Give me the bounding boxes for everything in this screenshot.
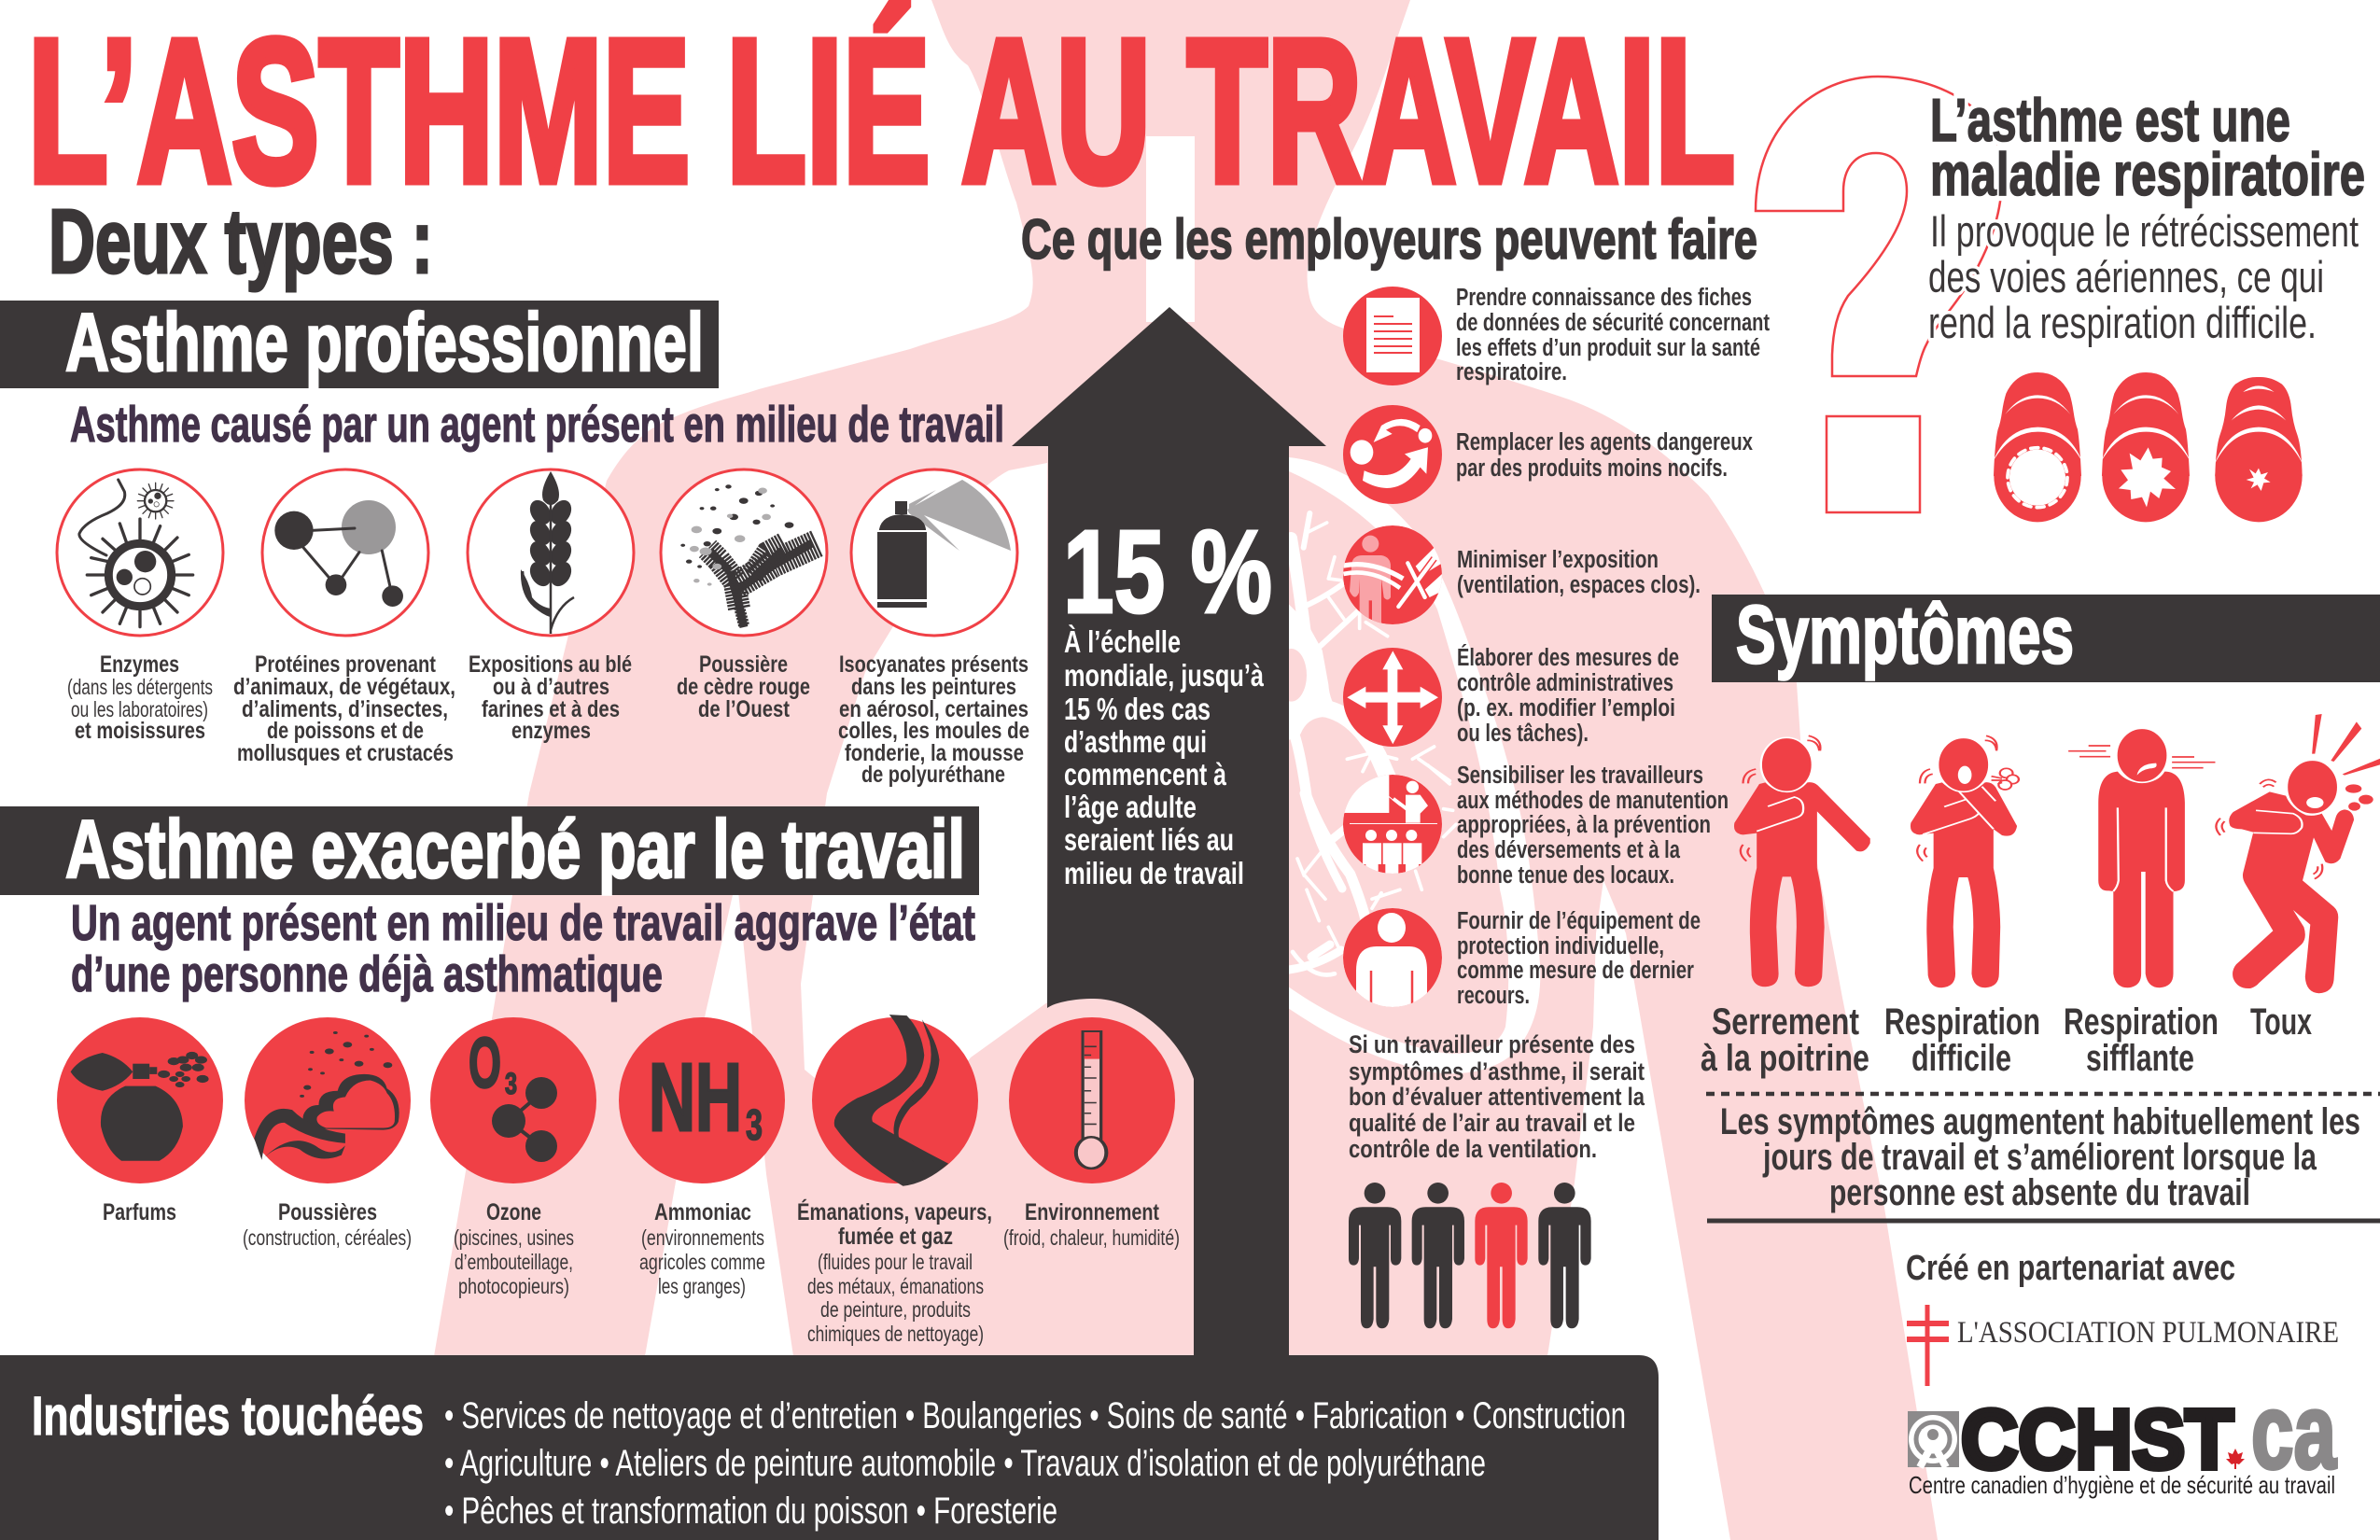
text: travailleur asthmatique: qualité de l’air au travail et le <box>1349 1109 1635 1137</box>
caption: ammoniac: les granges) <box>658 1274 746 1298</box>
panel: asthme exacerbé banner: Asthme exacerbé par le travail <box>65 803 965 895</box>
label: serrement: à la poitrine <box>1701 1038 1869 1079</box>
text: élaborer <box>1457 644 1679 747</box>
caption: isocyanates: de polyuréthane <box>861 762 1005 788</box>
emblem <box>1908 1411 1959 1467</box>
caption: ozone: photocopieurs) <box>458 1274 569 1298</box>
list: industries: • Agriculture • Ateliers de peinture automobile • Travaux d’isolation et de polyuréthane <box>444 1443 1486 1484</box>
text block: description <box>1928 206 2359 347</box>
text: maladie respiratoire <box>1928 86 2365 347</box>
icon: fumes <box>812 1015 978 1186</box>
caption: wheat: ou à d’autres <box>493 674 609 700</box>
caption: poussières: (construction, céréales) <box>243 1225 412 1250</box>
caption: isocyanates: Isocyanates présents <box>839 651 1029 678</box>
caption: émanations: Émanations, vapeurs, <box>797 1198 992 1225</box>
text: fournir: Fournir de l’équipement de <box>1457 908 1701 934</box>
caption: wheat: enzymes <box>511 718 591 744</box>
panel: industries touchées <box>0 1355 1659 1540</box>
caption: isocyanates: en aérosol, certaines <box>839 696 1029 722</box>
caption: émanations: des métaux, émanations <box>807 1274 984 1298</box>
caption: enzymes <box>67 651 213 744</box>
caption: environnement: Environnement <box>1025 1199 1160 1225</box>
caption: environnement: (froid, chaleur, humidité) <box>1003 1225 1180 1250</box>
figure: toux <box>2216 714 2380 993</box>
label: respiration sifflante: Respiration <box>2064 1001 2219 1043</box>
icon row: airway narrowing <box>1993 372 2303 522</box>
logo: CCHST <box>1908 1373 2337 1499</box>
text: sensibiliser: appropriées, à la prévention <box>1457 812 1711 838</box>
icon: wheat <box>468 469 634 636</box>
icon: ammonia: 3 <box>746 1100 763 1149</box>
caption: enzymes: ou les laboratoires) <box>71 697 208 721</box>
label: respiration difficile: difficile <box>1911 1038 2011 1079</box>
text: travailleur asthmatique: bon d’évaluer attentivement la <box>1349 1083 1645 1111</box>
caption: proteins: d’aliments, d’insectes, <box>242 696 448 722</box>
text: fournir: recours. <box>1457 983 1530 1009</box>
statistic: 15 %: commencent à <box>1064 757 1226 791</box>
icon: four workers <box>1349 1183 1591 1328</box>
text: fiches: de données de sécurité concernant <box>1456 310 1770 336</box>
caption: cedar: de l’Ouest <box>698 696 791 722</box>
text: sensibiliser: Sensibiliser les travailleurs <box>1457 763 1703 789</box>
text: travailleur asthmatique: contrôle de la ventilation. <box>1349 1135 1597 1163</box>
figure: serrement à la poitrine <box>1734 735 1870 987</box>
caption: émanations: chimiques de nettoyage) <box>807 1322 984 1346</box>
text: remplacer: Remplacer les agents dangereux <box>1456 429 1753 455</box>
caption: isocyanates: fonderie, la mousse <box>845 740 1024 766</box>
text: minimiser: (ventilation, espaces clos). <box>1457 572 1701 598</box>
label: respiration difficile: Respiration <box>1884 1001 2040 1043</box>
icon: constricted airway <box>2214 377 2303 522</box>
text: sensibiliser: bonne tenue des locaux. <box>1457 862 1674 889</box>
text: fournir: comme mesure de dernier <box>1457 958 1694 984</box>
text: remplacer <box>1456 429 1753 482</box>
label: toux: Toux <box>2250 1001 2312 1043</box>
icon: proteins <box>262 469 428 636</box>
caption: ozone <box>454 1199 574 1298</box>
icon: ozone <box>430 1017 596 1183</box>
subtitle: agent aggrave: d’une personne déjà asthmatique <box>71 946 663 1002</box>
caption: ammoniac: agricoles comme <box>639 1250 765 1274</box>
text: fiches <box>1456 285 1770 385</box>
icon: protective equipment <box>1343 908 1442 1017</box>
icon row: occupational agents <box>57 469 1017 636</box>
caption: proteins: mollusques et crustacés <box>237 740 454 766</box>
statistic: 15 %: milieu de travail <box>1064 856 1244 890</box>
icon: four arrows <box>1343 648 1442 747</box>
caption: ozone: (piscines, usines <box>454 1225 574 1250</box>
text: travailleur asthmatique <box>1349 1030 1645 1163</box>
text: symptoms note: personne est absente du travail <box>1829 1172 2250 1213</box>
caption: ammoniac: (environnements <box>641 1225 764 1250</box>
text: fournir: protection individuelle, <box>1457 933 1664 959</box>
labels: symptoms <box>1701 1001 2312 1079</box>
figures: symptoms <box>1734 714 2380 993</box>
heading: deux types: Deux types : <box>49 190 433 292</box>
subtitle: asthme causé: Asthme causé par un agent présent en milieu de travail <box>70 397 1004 453</box>
text: partenariat: Créé en partenariat avec <box>1906 1249 2235 1288</box>
captions: aggravating agents <box>103 1198 1180 1346</box>
logo: association pulmonaire <box>1907 1305 2339 1386</box>
text: élaborer: ou les tâches). <box>1457 721 1589 747</box>
text: sensibiliser: aux méthodes de manutention <box>1457 788 1729 814</box>
text: fiches: Prendre connaissance des fiches <box>1456 285 1752 311</box>
icon: thermometer <box>1009 1017 1175 1183</box>
icon row: aggravating agents <box>57 1015 1175 1186</box>
subtitle: agent aggrave <box>71 895 975 1002</box>
captions: occupational agents <box>67 651 1029 788</box>
text: minimiser <box>1457 547 1701 598</box>
text: remplacer: par des produits moins nocifs. <box>1456 455 1728 482</box>
icon: dust cloud <box>245 1017 411 1183</box>
caption: parfums: Parfums <box>103 1199 176 1225</box>
statistic: 15 % <box>1063 506 1272 890</box>
list: industries: • Pêches et transformation du poisson • Foresterie <box>444 1491 1057 1532</box>
statistic: 15 %: d’asthme qui <box>1064 724 1207 759</box>
caption: wheat: Expositions au blé <box>469 651 632 678</box>
statistic: 15 %: seraient liés au <box>1064 822 1234 857</box>
icon: enzymes <box>57 469 223 636</box>
label: respiration difficile <box>1884 1001 2040 1079</box>
statistic: 15 %: À l’échelle <box>1064 624 1181 659</box>
icon: spray can <box>851 469 1017 636</box>
label: serrement <box>1701 1001 1869 1079</box>
subtitle: agent aggrave: Un agent présent en milieu de travail aggrave l’état <box>71 895 975 951</box>
caption: émanations: de peinture, produits <box>820 1297 971 1322</box>
text: élaborer: (p. ex. modifier l’emploi <box>1457 695 1675 721</box>
text: fournir <box>1457 908 1701 1009</box>
caption: ammoniac <box>639 1199 765 1298</box>
figure: respiration sifflante <box>2068 728 2215 987</box>
caption: cedar: de cèdre rouge <box>677 674 810 700</box>
logo: CCHST: ca <box>2251 1373 2337 1491</box>
text: fiches: respiratoire. <box>1456 359 1567 385</box>
text: sensibiliser <box>1457 763 1729 889</box>
label: serrement: Serrement <box>1712 1001 1859 1043</box>
icon: minimize exposure <box>1343 525 1442 624</box>
text: minimiser: Minimiser l’exposition <box>1457 547 1659 573</box>
caption: cedar: Poussière <box>699 651 788 678</box>
caption: ozone: Ozone <box>486 1199 541 1225</box>
heading: industries: Industries touchées <box>32 1386 424 1447</box>
caption: poussières <box>243 1199 412 1250</box>
icon: normal airway <box>1993 372 2082 522</box>
text: travailleur asthmatique: symptômes d’asthme, il serait <box>1349 1057 1645 1085</box>
arrow: dark upward arrow <box>1012 307 1326 1356</box>
caption: enzymes: Enzymes <box>100 651 179 678</box>
icon: ammonia <box>619 1017 785 1183</box>
caption: ammoniac: Ammoniac <box>654 1199 751 1225</box>
caption: proteins: de poissons et de <box>267 718 424 744</box>
heading: employeurs: Ce que les employeurs peuvent faire <box>1021 208 1757 271</box>
icon: perfume <box>57 1017 223 1183</box>
icon: substitution arrows <box>1343 405 1442 504</box>
caption: wheat: farines et à des <box>482 696 620 722</box>
statistic: 15 %: 15 % <box>1063 506 1272 637</box>
panel: symptômes banner <box>1712 588 2380 682</box>
list: employer actions <box>1341 285 1770 1017</box>
text: élaborer: Élaborer des mesures de <box>1457 644 1679 671</box>
text: fiches: les effets d’un produit sur la santé <box>1456 335 1760 361</box>
icon: ozone: O <box>469 1024 501 1103</box>
icon: inflamed airway <box>2101 372 2191 522</box>
caption: isocyanates <box>838 651 1029 788</box>
caption: émanations <box>797 1198 992 1346</box>
text: symptoms note <box>1720 1101 2360 1213</box>
panel: symptômes banner: Symptômes <box>1736 588 2074 680</box>
caption: proteins <box>233 651 455 766</box>
icon: question mark outline <box>1756 77 2002 512</box>
caption: proteins: Protéines provenant <box>255 651 437 678</box>
caption: poussières: Poussières <box>278 1199 377 1225</box>
icon: cedar <box>661 469 827 636</box>
label: respiration sifflante <box>2064 1001 2219 1079</box>
caption: émanations: fumée et gaz <box>838 1224 953 1250</box>
heading: maladie respiratoire <box>1930 86 2365 208</box>
statistic: 15 %: mondiale, jusqu’à <box>1064 658 1264 693</box>
icon: ammonia: NH <box>649 1043 742 1151</box>
caption: émanations: (fluides pour le travail <box>818 1250 973 1274</box>
text: élaborer: contrôle administratives <box>1457 670 1673 696</box>
background: human body silhouette <box>434 0 1938 1540</box>
text: sensibiliser: des déversements et à la <box>1457 837 1681 863</box>
caption: enzymes: et moisissures <box>75 718 205 744</box>
icon: document <box>1343 287 1442 385</box>
list: industries: • Services de nettoyage et d’entretien • Boulangeries • Soins de santé • Fabrication • Construction <box>444 1395 1626 1436</box>
text: travailleur asthmatique: Si un travailleur présente des <box>1349 1030 1635 1058</box>
caption: isocyanates: colles, les moules de <box>838 718 1029 744</box>
label: respiration sifflante: sifflante <box>2086 1038 2194 1079</box>
figure: respiration difficile <box>1911 735 2019 987</box>
logo: CCHST: CCHST <box>1961 1393 2233 1487</box>
icon: ozone: 3 <box>505 1067 517 1100</box>
caption: ozone: d’embouteillage, <box>455 1250 573 1274</box>
caption: enzymes: (dans les détergents <box>67 675 213 699</box>
caption: cedar <box>677 651 810 722</box>
statistic: 15 %: 15 % des cas <box>1064 692 1211 726</box>
caption: environnement <box>1003 1199 1180 1250</box>
list: industries <box>444 1395 1626 1532</box>
caption: proteins: d’animaux, de végétaux, <box>233 674 455 700</box>
statistic: 15 %: l’âge adulte <box>1064 790 1197 824</box>
icon: training <box>1343 775 1442 874</box>
caption: wheat <box>469 651 632 744</box>
caption: isocyanates: dans les peintures <box>851 674 1016 700</box>
panel: asthme professionnel banner: Asthme professionnel <box>65 296 704 388</box>
